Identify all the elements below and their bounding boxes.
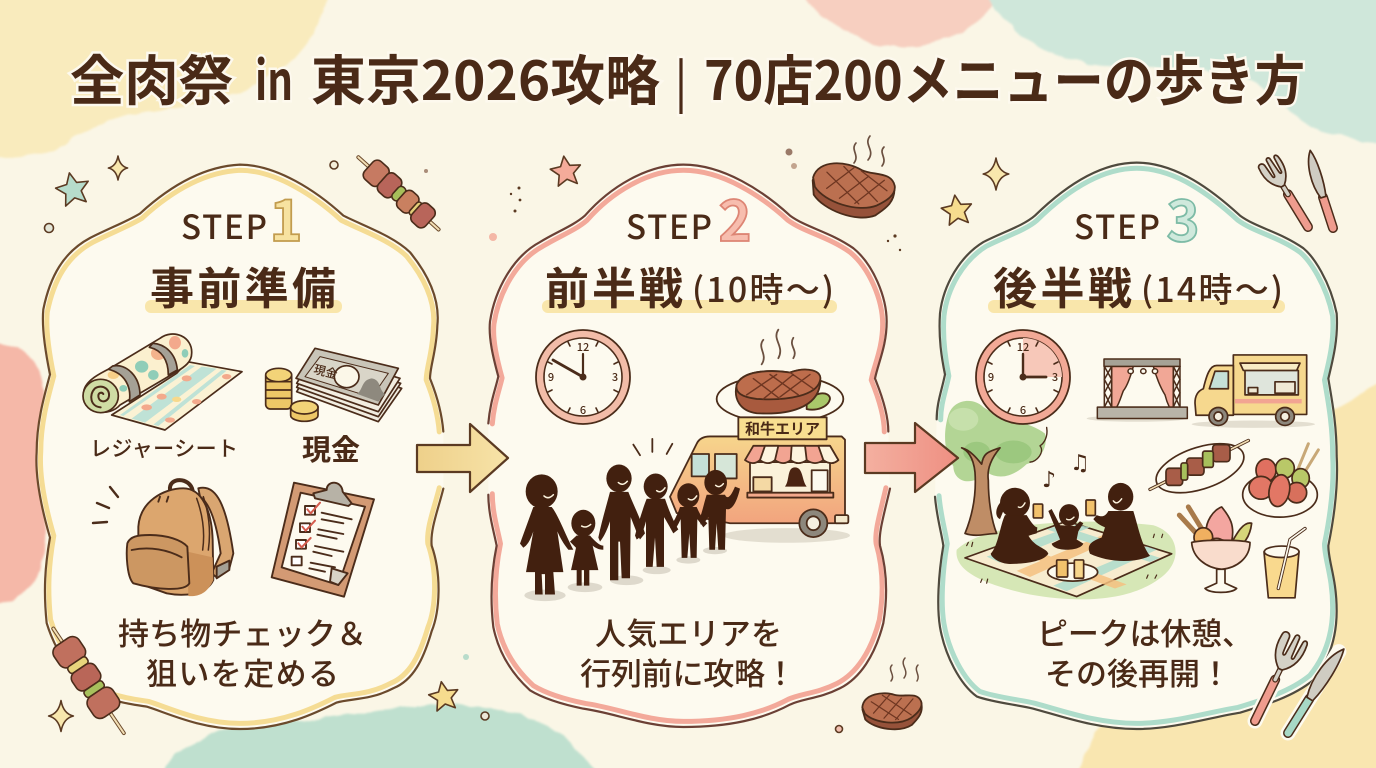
person: 5 bbox=[670, 483, 707, 558]
decoration 3 bbox=[940, 158, 1009, 226]
icon: steam top bbox=[854, 136, 884, 166]
caption 2: 人気エリアを bbox=[595, 609, 782, 654]
person: 4 bbox=[635, 474, 678, 567]
skewer plate bbox=[1152, 434, 1248, 502]
caption 1 bbox=[118, 609, 367, 694]
step 2 label bbox=[626, 177, 752, 258]
tree foliage bbox=[945, 401, 1046, 481]
decoration stars 1 bbox=[44, 156, 461, 732]
panel: step 3 bbox=[935, 149, 1347, 737]
title bbox=[70, 37, 1305, 116]
icon: steak top bbox=[808, 160, 897, 222]
icon: clipboard checklist bbox=[272, 483, 374, 597]
icon: clock 2: 9 bbox=[988, 369, 994, 385]
icon: backpack bbox=[127, 480, 233, 596]
step 2 label: STEP bbox=[626, 201, 712, 249]
panel: step 2 bbox=[463, 136, 923, 732]
step 2 label: 2 bbox=[718, 177, 752, 258]
person: child 1 bbox=[570, 510, 603, 586]
icon: clock 2: 12 bbox=[1017, 339, 1029, 355]
step 3 label bbox=[1074, 177, 1200, 258]
bill text: 現金 bbox=[312, 360, 339, 383]
heading: 前半戦: (10時〜) bbox=[692, 263, 834, 312]
icon: clock 10 bbox=[536, 330, 630, 424]
panel outline 1 bbox=[36, 165, 443, 729]
icon: stage bbox=[1087, 359, 1187, 422]
people silhouettes bbox=[991, 483, 1150, 564]
caption 3 bbox=[1037, 609, 1253, 694]
silhouettes: queue of people bbox=[520, 439, 740, 601]
icon: skewer bottom bbox=[41, 620, 136, 741]
icon: clock 10: 12 bbox=[577, 339, 589, 355]
meat and fruit plate bbox=[1243, 472, 1317, 517]
caption 1: 持ち物チェック＆ bbox=[118, 609, 367, 654]
caption 3: その後再開！ bbox=[1045, 649, 1231, 694]
heading: 前半戦: 前半戦 bbox=[545, 253, 683, 317]
step 3 label: 3 bbox=[1166, 177, 1200, 258]
icon: leisure sheet bbox=[83, 334, 242, 430]
blanket bbox=[965, 521, 1172, 597]
music notes: ♪ bbox=[1042, 468, 1056, 493]
icon: picnic scene bbox=[945, 401, 1176, 599]
icon: knife bottom bbox=[1282, 644, 1347, 737]
icon: fork top bbox=[1256, 153, 1318, 233]
title: | bbox=[674, 43, 688, 115]
grass bbox=[956, 522, 1176, 599]
music notes bbox=[1042, 451, 1090, 493]
juice glass bbox=[1264, 552, 1299, 598]
step 1 label bbox=[181, 177, 303, 258]
step 1 label: 1 bbox=[269, 177, 303, 258]
panel: step 1 bbox=[36, 148, 461, 741]
icon: steam bottom bbox=[890, 658, 918, 681]
person: 6 bbox=[699, 470, 740, 550]
caption 3: ピークは休憩、 bbox=[1037, 609, 1253, 654]
heading: 前半戦 bbox=[545, 253, 834, 317]
label: cash: 現金 bbox=[302, 427, 360, 469]
icon: clock 2: 3 bbox=[1052, 369, 1058, 385]
truck sign text: 和牛エリア bbox=[745, 418, 820, 439]
caption 2: 行列前に攻略！ bbox=[580, 649, 796, 694]
heading: 後半戦: 後半戦 bbox=[993, 253, 1132, 317]
highlight underline 1 bbox=[145, 300, 342, 313]
person: woman bbox=[520, 474, 573, 595]
mugs held bbox=[1033, 500, 1095, 518]
highlight underline 3 bbox=[988, 300, 1285, 313]
icon: clock 10: 9 bbox=[548, 369, 554, 385]
panel outline 3 bbox=[935, 163, 1337, 729]
title: in bbox=[255, 37, 293, 116]
icon: clock 10: 6 bbox=[580, 402, 586, 418]
food plates bbox=[1150, 434, 1318, 598]
picnic plate and cups bbox=[1048, 563, 1098, 581]
music notes: ♫ bbox=[1070, 451, 1090, 476]
caption 1: 狙いを定める bbox=[146, 649, 339, 694]
icon: clock 2 bbox=[976, 330, 1070, 424]
highlight underline 2 bbox=[542, 300, 837, 313]
tree trunk bbox=[962, 448, 1000, 535]
label: leisure sheet: レジャーシート bbox=[90, 433, 238, 463]
icon: clock 2: 6 bbox=[1020, 402, 1026, 418]
parfait bbox=[1179, 515, 1200, 538]
caption 2 bbox=[580, 609, 796, 694]
heading: 事前準備: 事前準備 bbox=[150, 253, 336, 317]
icon: truck bbox=[1192, 355, 1315, 428]
icon: steak bottom bbox=[861, 691, 923, 732]
icon: wagyu food truck bbox=[670, 330, 850, 543]
step 3 label: STEP bbox=[1074, 201, 1160, 249]
title: 東京2026攻略 bbox=[311, 37, 660, 116]
icon: knife top bbox=[1303, 149, 1338, 230]
icon: fork bottom bbox=[1242, 629, 1310, 727]
arrow 1 bbox=[417, 424, 508, 492]
step 1 label: STEP bbox=[181, 201, 267, 249]
heading: 後半戦 bbox=[993, 253, 1283, 317]
person: man bbox=[598, 465, 645, 580]
arrow 2 bbox=[865, 423, 958, 492]
icon: clock 10: 3 bbox=[612, 369, 618, 385]
heading: 後半戦: (14時〜) bbox=[1141, 263, 1283, 312]
icon: skewer top bbox=[350, 148, 447, 238]
title: 70店200メニューの歩き方 bbox=[704, 37, 1305, 116]
icon: cash and coins bbox=[266, 348, 402, 422]
panel outline 2 bbox=[488, 165, 890, 727]
burst lines bbox=[93, 487, 118, 523]
title: 全肉祭 bbox=[70, 37, 233, 116]
decoration 2 bbox=[463, 148, 901, 732]
